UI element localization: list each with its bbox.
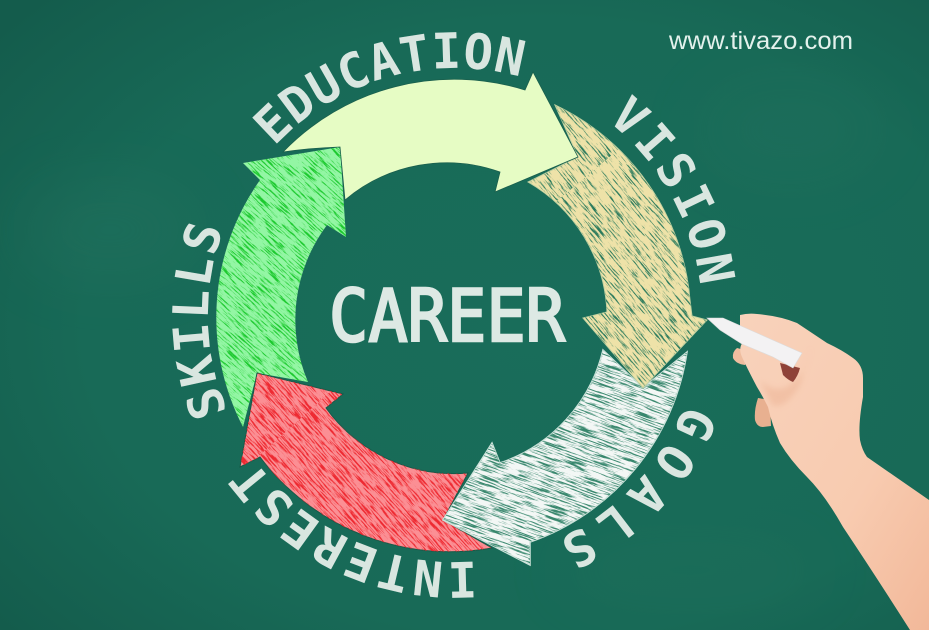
arrow: education <box>283 72 578 200</box>
label: vision: VISION <box>614 94 736 284</box>
palm shading <box>760 345 812 406</box>
label: education: EDUCATION <box>252 32 526 144</box>
website url: www.tivazo.com <box>668 27 853 55</box>
illustration: hand holding chalk <box>707 314 929 630</box>
arrow: interest <box>240 373 492 552</box>
finger gap shadow <box>780 363 800 382</box>
label: goals: GOALS <box>564 410 714 568</box>
arrow: skills <box>216 147 346 427</box>
label: interest: INTEREST <box>228 468 474 598</box>
arrow: goals <box>443 350 687 565</box>
center heading: career: CAREER <box>329 274 566 358</box>
back finger lower <box>755 398 771 427</box>
arrow: vision <box>528 105 707 388</box>
back finger upper <box>733 348 752 365</box>
label: skills: SKILLS <box>172 224 225 418</box>
chalk stick <box>707 318 802 368</box>
arm and hand <box>740 314 929 630</box>
